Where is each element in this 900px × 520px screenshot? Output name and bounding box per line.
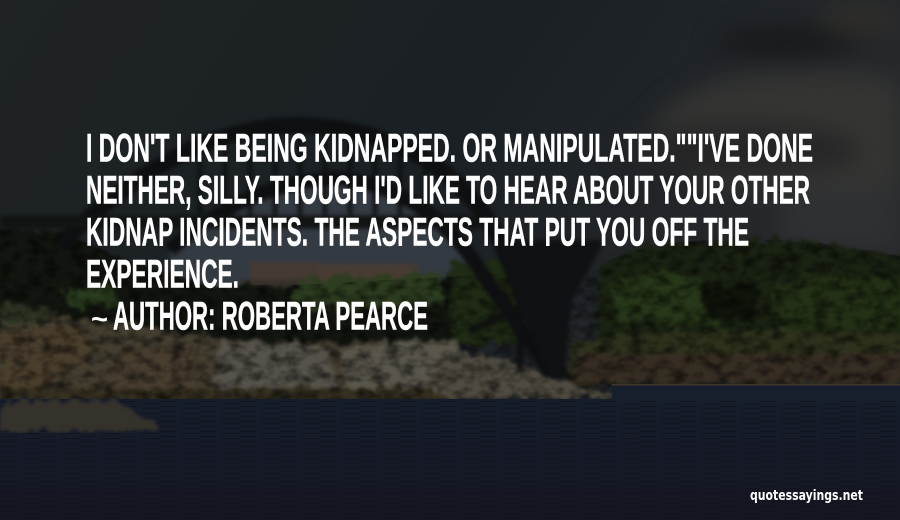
sky: [0, 0, 900, 400]
bridge right pier: [495, 240, 605, 378]
left rocky shore: [0, 318, 460, 400]
buildings: [240, 262, 418, 294]
right forest: [450, 239, 900, 384]
clouds: [620, 2, 900, 250]
right shore: [568, 352, 900, 384]
author attribution: [91, 294, 428, 338]
author attribution: AUTHOR: ROBERTA PEARCE: [113, 294, 428, 338]
centre rock: [440, 352, 620, 398]
bridge arch: [0, 125, 560, 375]
author attribution: ~: [91, 303, 108, 336]
quote line 4: EXPERIENCE.: [86, 252, 239, 296]
left forest: [0, 225, 480, 345]
quote text: [86, 126, 813, 296]
rock spit: [0, 400, 158, 431]
sky seen under the bridge: [170, 178, 468, 300]
watermark: quotessayings.net: [750, 488, 863, 504]
land texture: [0, 225, 900, 400]
water: [0, 399, 900, 520]
